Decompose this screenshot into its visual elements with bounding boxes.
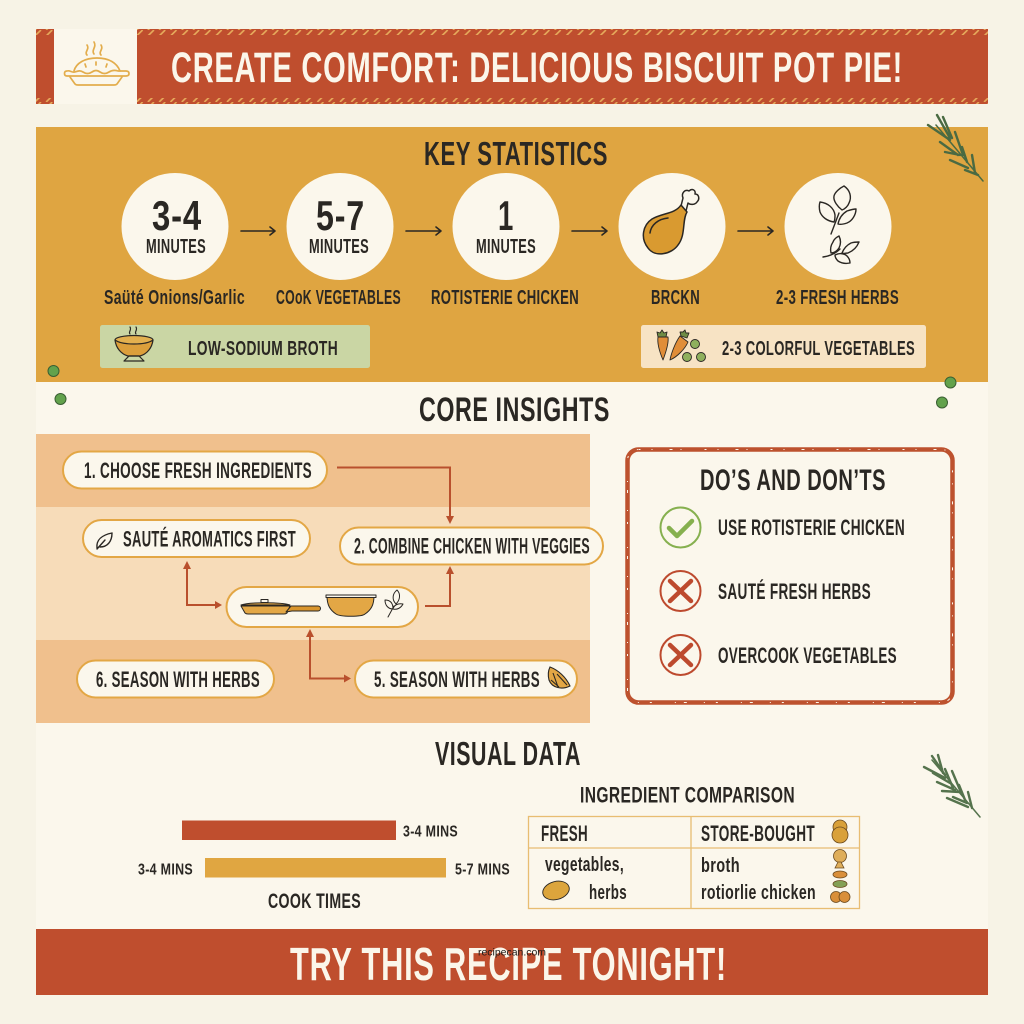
callout: colorful vegetables [641,325,926,368]
callout: low-sodium broth: LOW-SODIUM BROTH [188,338,338,360]
heading: ingredient comparison: INGREDIENT COMPARISON [580,782,795,808]
chart: cook times: COOK TIMES [268,890,361,913]
arrow [738,227,773,235]
icon: potato [541,878,571,903]
decorative dots [48,366,956,408]
pill: step 2 [340,528,603,564]
heading: core insights: CORE INSIGHTS [419,391,610,429]
icon: soup bowl [115,327,153,361]
arrow [406,227,441,235]
heading: visual data: VISUAL DATA [435,735,581,772]
chart: cook times [138,820,510,913]
arrow: pans to step 5 [306,629,351,682]
item: dont overcook: OVERCOOK VEGETABLES [718,643,897,668]
stat: 1 minutes: ROTISTERIE CHICKEN [431,287,579,309]
stat: 5-7 minutes: MINUTES [309,236,369,258]
item: dont overcook [660,635,897,675]
stat: 3-4 minutes: Saüté Onions/Garlic [104,287,245,309]
icon: carrots and peas [657,330,706,362]
pill: saute aromatics: SAUTÉ AROMATICS FIRST [123,526,296,552]
icon: herb sprig [385,590,403,617]
table: ingredient comparison: herbs [589,882,627,904]
pill: step 1: 1. CHOOSE FRESH INGREDIENTS [84,458,312,483]
pill: step 2: 2. COMBINE CHICKEN WITH VEGGIES [354,534,590,558]
stat: 5-7 minutes: COoK VEGETABLES [276,287,401,309]
pill: step 5 [355,660,577,698]
header banner [36,29,988,104]
icon: pan [241,600,321,614]
pill: step 6 [77,660,274,698]
heading: key statistics: KEY STATISTICS [424,135,608,172]
panel: flow diagram [36,434,603,723]
item: do: USE ROTISTERIE CHICKEN [718,515,905,540]
stat: 3-4 minutes: MINUTES [146,236,206,258]
item: do [660,508,905,548]
pill: pans [226,587,418,627]
footer banner [36,929,988,995]
arrow: saute to pans [183,561,222,609]
table: ingredient comparison [528,816,860,908]
stat: chicken: BRCKN [651,287,700,309]
stat: 1 minutes: MINUTES [476,236,536,258]
icon: lemon wedge [548,667,570,688]
icon: drumstick [643,190,699,254]
stat: herbs [776,173,899,309]
arrow [572,227,607,235]
footer banner: TRY THIS RECIPE TONIGHT! [290,938,727,990]
icon: rosemary top [928,115,983,181]
callout: colorful vegetables: 2-3 COLORFUL VEGETABLES [722,338,915,360]
icon: small ingredients [830,820,850,902]
table: ingredient comparison: FRESH [541,821,588,846]
pill: step 6: 6. SEASON WITH HERBS [96,667,260,692]
panel: dos and donts [628,450,952,702]
callout: low-sodium broth [100,325,370,368]
icon: rosemary bottom [924,755,980,817]
icon: bowl [326,595,376,616]
arrow [241,227,275,235]
stat: 1 minutes: 1 [498,192,514,239]
chart: cook times: 5-7 MINS [455,862,510,878]
stat: 5-7 minutes: 5-7 [316,192,365,239]
pill: saute aromatics [83,520,310,557]
chart: cook times: 3-4 MINS [403,824,458,840]
heading: DO’S AND DON’TS [700,464,886,497]
table: ingredient comparison: STORE-BOUGHT [701,821,815,846]
icon: leaf [97,533,112,549]
pill: step 5: 5. SEASON WITH HERBS [374,667,540,692]
item: dont saute [660,571,871,611]
icon: pie [64,42,129,85]
table: ingredient comparison: broth [701,855,740,877]
stat: 3-4 minutes: 3-4 [152,192,202,239]
stat: 1 minutes [431,173,579,309]
chart: cook times: 3-4 MINS [138,862,193,878]
pill: step 1 [63,452,327,488]
item: dont saute: SAUTÉ FRESH HERBS [718,579,871,604]
stat: 3-4 minutes [104,173,245,309]
watermark: recipecan.com [478,946,546,958]
table: ingredient comparison: vegetables, [545,854,624,876]
panel: key statistics [36,127,988,382]
icon: herbs [819,186,859,263]
stat: 5-7 minutes [276,173,401,309]
arrow: pans to step 2 [425,566,454,606]
table: ingredient comparison: rotiorlie chicken [701,882,816,904]
stat: chicken [618,173,726,309]
stat: herbs: 2-3 FRESH HERBS [776,287,899,309]
arrow: step 1 to step 2 [337,468,454,524]
